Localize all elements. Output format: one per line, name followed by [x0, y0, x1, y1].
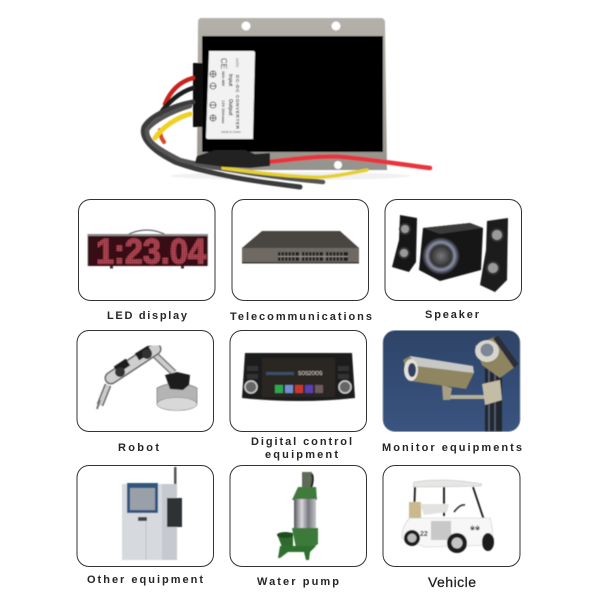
label: Telecommunications	[230, 311, 372, 323]
white specification label: 12V 20Amax	[221, 100, 226, 124]
ground shadow	[170, 172, 410, 180]
icon: robot arm	[97, 349, 197, 410]
panel: Water pump	[230, 466, 366, 588]
white specification label: MADE IN CHINA	[221, 130, 241, 134]
white specification label	[206, 51, 255, 139]
label: Digital control	[251, 436, 352, 448]
white specification label: 24/5V	[235, 58, 239, 68]
metal mounting plate	[197, 18, 387, 170]
input and output wires	[143, 78, 430, 187]
black converter housing	[202, 36, 383, 152]
panel: LED display	[78, 200, 215, 322]
icon: golf cart	[402, 480, 494, 553]
panel: Vehicle	[383, 466, 520, 590]
label: Monitor equipments	[382, 442, 522, 454]
icon: network switch	[242, 231, 359, 264]
label: Other equipment	[87, 574, 203, 586]
icon: golf cart: ※※	[470, 524, 480, 532]
label: LED display	[107, 310, 188, 322]
panel: Robot	[77, 330, 214, 454]
DC-DC converter product photo	[143, 18, 430, 187]
white specification label: Input	[227, 74, 233, 87]
panel: Telecommunications	[230, 200, 372, 323]
label: Vehicle	[428, 574, 476, 590]
panel: Digital control equipment	[230, 330, 366, 461]
label: Robot	[118, 442, 159, 454]
white specification label: Output	[227, 99, 233, 116]
icon: industrial machine	[122, 467, 182, 560]
white specification label: 36V-48V	[221, 71, 226, 87]
panel: Speaker	[385, 200, 522, 321]
icon: LED scoreboard: 1:23.04	[96, 232, 206, 272]
icon: golf cart: 22	[420, 531, 428, 538]
icon: security cameras	[403, 335, 519, 431]
white specification label: CE	[219, 58, 228, 69]
icon: submersible pump	[277, 472, 318, 560]
panel: Other equipment	[77, 466, 214, 586]
label: Speaker	[425, 309, 480, 321]
label line two: equipment	[265, 449, 338, 461]
label: Water pump	[257, 576, 339, 588]
icon: speaker set	[392, 215, 508, 292]
icon: car head unit: SOS2OOS	[298, 371, 323, 377]
white specification label: DC-DC CONVERTER	[235, 75, 240, 130]
black inline fuse holder	[195, 150, 270, 168]
panel: Monitor equipments	[382, 330, 522, 454]
